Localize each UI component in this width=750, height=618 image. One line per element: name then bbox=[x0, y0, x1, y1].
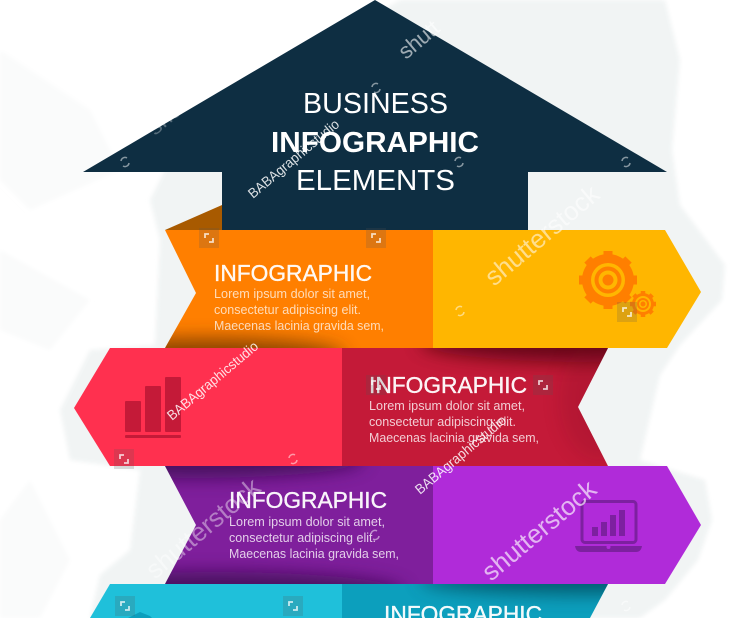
text: red row bbox=[369, 372, 539, 445]
text: orange row bbox=[214, 260, 384, 333]
text: red row: INFOGRAPHIC bbox=[369, 372, 527, 398]
panel: orange and yellow row bbox=[165, 230, 701, 348]
panel: red row bbox=[74, 348, 608, 466]
watermarks: shutterstock bbox=[144, 42, 255, 140]
text: orange row: INFOGRAPHIC bbox=[214, 260, 372, 286]
watermarks: BABAgraphicstudio bbox=[164, 338, 261, 423]
panel: purple row bbox=[165, 466, 701, 584]
text: red row: Lorem ipsum dolor sit amet, bbox=[369, 399, 525, 413]
text: purple row: consectetur adipiscing elit. bbox=[229, 531, 376, 545]
watermarks: shutterstock bbox=[479, 178, 606, 292]
watermarks: shutterstock bbox=[476, 473, 603, 587]
text: orange row: Lorem ipsum dolor sit amet, bbox=[214, 287, 370, 301]
watermarks: shutt bbox=[393, 15, 444, 64]
icon: bar chart bbox=[125, 377, 181, 438]
text: red row: Maecenas lacinia gravida sem, bbox=[369, 431, 539, 445]
text: purple row bbox=[229, 487, 399, 561]
watermarks: shutterstock bbox=[140, 471, 267, 585]
text: purple row: INFOGRAPHIC bbox=[229, 487, 387, 513]
title: ELEMENTS bbox=[296, 165, 455, 197]
arrow head banner bbox=[83, 0, 667, 230]
text: purple row: Lorem ipsum dolor sit amet, bbox=[229, 515, 385, 529]
icon: laptop with chart bbox=[575, 502, 642, 552]
watermarks bbox=[114, 15, 637, 616]
text: purple row: Maecenas lacinia gravida sem, bbox=[229, 547, 399, 561]
text: orange row: Maecenas lacinia gravida sem, bbox=[214, 319, 384, 333]
text: red row: consectetur adipiscing elit. bbox=[369, 415, 516, 429]
icon: gears bbox=[579, 251, 656, 317]
watermarks: BABAgraphicstudio bbox=[412, 412, 509, 497]
title: BUSINESS bbox=[303, 88, 448, 120]
text: orange row: consectetur adipiscing elit. bbox=[214, 303, 361, 317]
title: INFOGRAPHIC bbox=[271, 127, 479, 159]
orange fold shadow bbox=[165, 205, 222, 230]
title bbox=[271, 88, 479, 197]
panel: teal row bbox=[90, 584, 608, 618]
icon: partial teal icon bbox=[128, 612, 152, 618]
watermarks: BABAgraphicstudio bbox=[245, 116, 342, 201]
